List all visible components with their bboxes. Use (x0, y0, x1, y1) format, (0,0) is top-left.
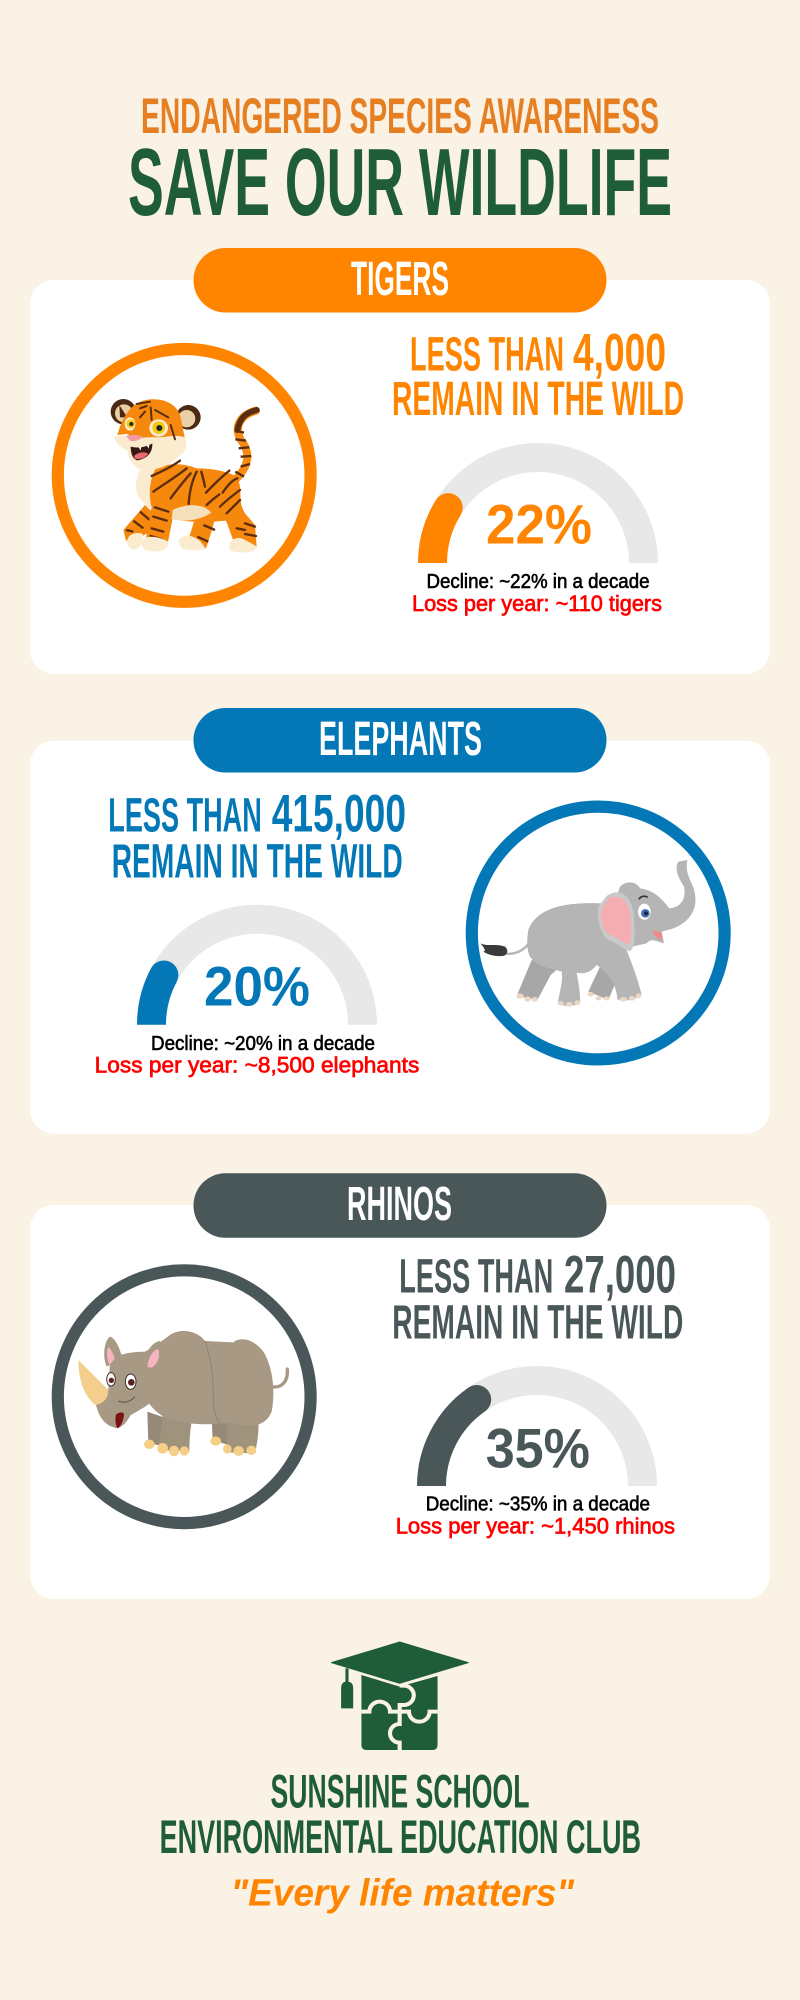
stat headline: elephants: LESS THAN (108, 789, 262, 843)
heading: tigers: TIGERS (351, 253, 449, 306)
panel: elephants (30, 708, 770, 1134)
loss text: rhinos: Loss per year: ~1,450 rhinos (396, 1513, 675, 1538)
header (128, 88, 672, 236)
loss text: tigers: Loss per year: ~110 tigers (412, 591, 662, 616)
stat headline: elephants (108, 785, 406, 889)
heading: rhinos: RHINOS (347, 1178, 452, 1231)
decline text: tigers: Decline: ~22% in a decade (426, 571, 650, 593)
gauge: 20 percent: 20% (204, 955, 310, 1018)
footer (160, 1642, 641, 1915)
loss text: elephants: Loss per year: ~8,500 elephants (95, 1053, 419, 1078)
stat headline: tigers: LESS THAN (410, 327, 564, 381)
stat headline: elephants: 415,000 (272, 785, 406, 844)
icon: rhino in circle (58, 1270, 311, 1523)
stat headline: rhinos (392, 1246, 683, 1349)
icon: graduation cap puzzle logo (331, 1642, 468, 1751)
panel: tigers (30, 248, 770, 674)
panel: rhinos (30, 1173, 770, 1599)
stat headline: tigers (392, 323, 684, 426)
stat headline: rhinos: 27,000 (564, 1246, 676, 1305)
decline text: rhinos: Decline: ~35% in a decade (426, 1494, 650, 1516)
stat headline: elephants: REMAIN IN THE WILD (112, 835, 403, 889)
gauge: 35 percent: 35% (486, 1417, 590, 1480)
icon: elephant in circle (472, 807, 725, 1059)
decline text: elephants: Decline: ~20% in a decade (151, 1033, 375, 1055)
gauge: 22 percent: 22% (486, 492, 592, 556)
heading: tigers (194, 248, 606, 312)
heading: elephants: ELEPHANTS (319, 713, 482, 766)
stat headline: tigers: 4,000 (573, 323, 666, 382)
heading: rhinos (194, 1173, 606, 1238)
tagline: "Every life matters" (231, 1873, 575, 1915)
icon: tiger in circle (58, 349, 311, 602)
school name: SUNSHINE SCHOOL (270, 1766, 530, 1818)
heading: elephants (194, 708, 606, 772)
stat headline: rhinos: LESS THAN (399, 1250, 553, 1304)
gauge: 20 percent (149, 919, 362, 1025)
gauge: 35 percent (432, 1381, 642, 1486)
gauge: 22 percent (432, 458, 644, 563)
